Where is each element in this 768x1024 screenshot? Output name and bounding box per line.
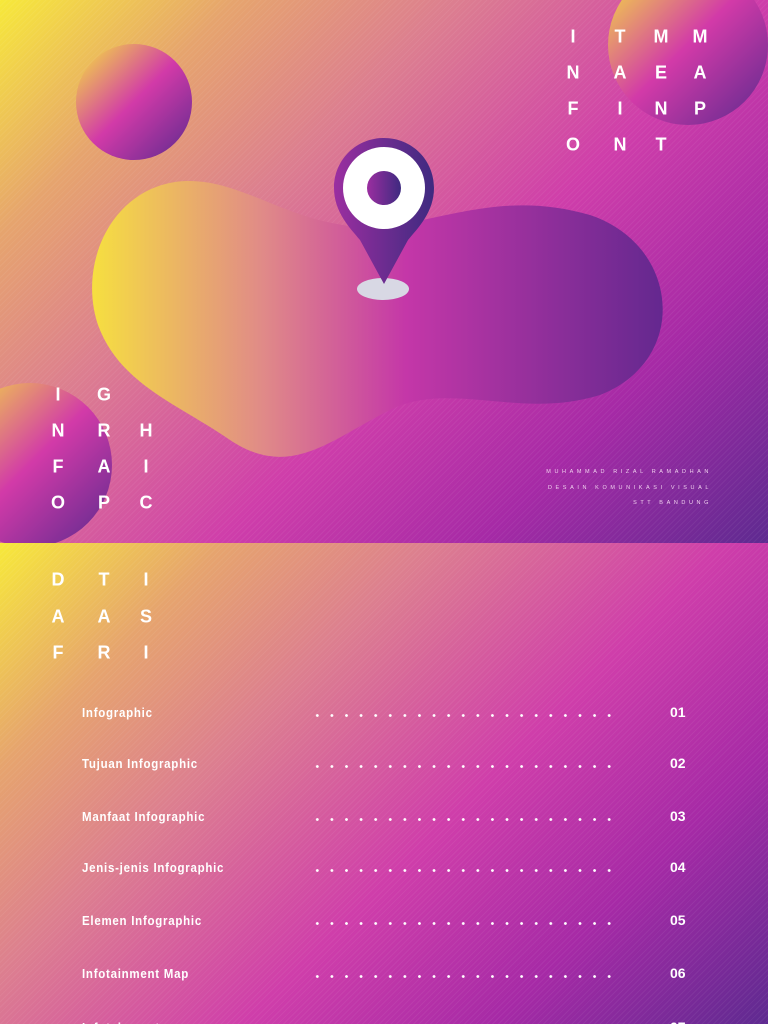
heading: daftar isi: D [52,570,64,590]
title: infographic: I [143,456,149,476]
heading: daftar isi: A [98,606,110,626]
author credits [546,469,712,506]
decorative circles and blob [0,0,768,543]
title: infographic: A [98,456,110,476]
title: infotainment map: M [692,26,708,46]
title: infographic: H [140,420,152,440]
list of contents: 02 [670,755,686,771]
title: infographic: C [140,492,152,512]
list of contents: Infographic [82,706,153,720]
title: infographic: I [55,384,61,404]
list of contents: Tujuan Infographic [82,757,198,771]
list of contents: Manfaat Infographic [82,810,205,824]
heading: daftar isi: R [98,642,110,662]
blob [92,181,663,457]
title: infographic: G [97,384,111,404]
list of contents: Infotainment Map [82,967,189,981]
author credits: STT BANDUNG [633,500,712,506]
title: infotainment map: T [614,26,626,46]
title: infotainment map: M [654,26,668,46]
title: infotainment map: A [694,62,706,82]
heading: daftar isi [52,570,152,662]
title: infographic: R [98,420,110,440]
title: infotainment map: P [694,98,706,118]
slide 2: table of contents [0,543,768,1024]
author credits: MUHAMMAD RIZAL RAMADHAN [546,469,712,475]
list of contents: 06 [670,965,686,981]
list of contents [82,704,686,1024]
author credits: DESAIN KOMUNIKASI VISUAL [548,484,712,490]
title: infotainment map: E [655,62,667,82]
title: infotainment map: A [614,62,626,82]
title: infotainment map: F [568,98,578,118]
heading: daftar isi: F [52,642,64,662]
list of contents: Elemen Infographic [82,914,202,928]
title: infographic: F [52,456,64,476]
title: infographic: O [51,492,65,512]
icon: map pin [334,138,434,300]
title: infotainment map: N [566,62,580,82]
heading: daftar isi: T [98,570,110,590]
title: infotainment map [566,26,708,154]
title: infotainment map: N [614,134,626,154]
list of contents: 03 [670,808,686,824]
title: infotainment map: N [654,98,668,118]
list of contents: 05 [670,912,686,928]
title: infotainment map: O [566,134,580,154]
list of contents: Jenis-jenis Infographic [82,861,224,875]
title: infotainment map: I [617,98,623,118]
heading: daftar isi: I [143,642,149,662]
title: infographic: N [52,420,64,440]
title: infotainment map: I [570,26,576,46]
heading: daftar isi: S [140,606,152,626]
list of contents: 01 [670,704,686,720]
slide 1: cover [0,0,768,543]
heading: daftar isi: I [143,570,149,590]
heading: daftar isi: A [52,606,64,626]
title: infographic [51,384,152,512]
title: infographic: P [98,492,110,512]
list of contents: 04 [670,859,686,875]
title: infotainment map: T [656,134,666,154]
